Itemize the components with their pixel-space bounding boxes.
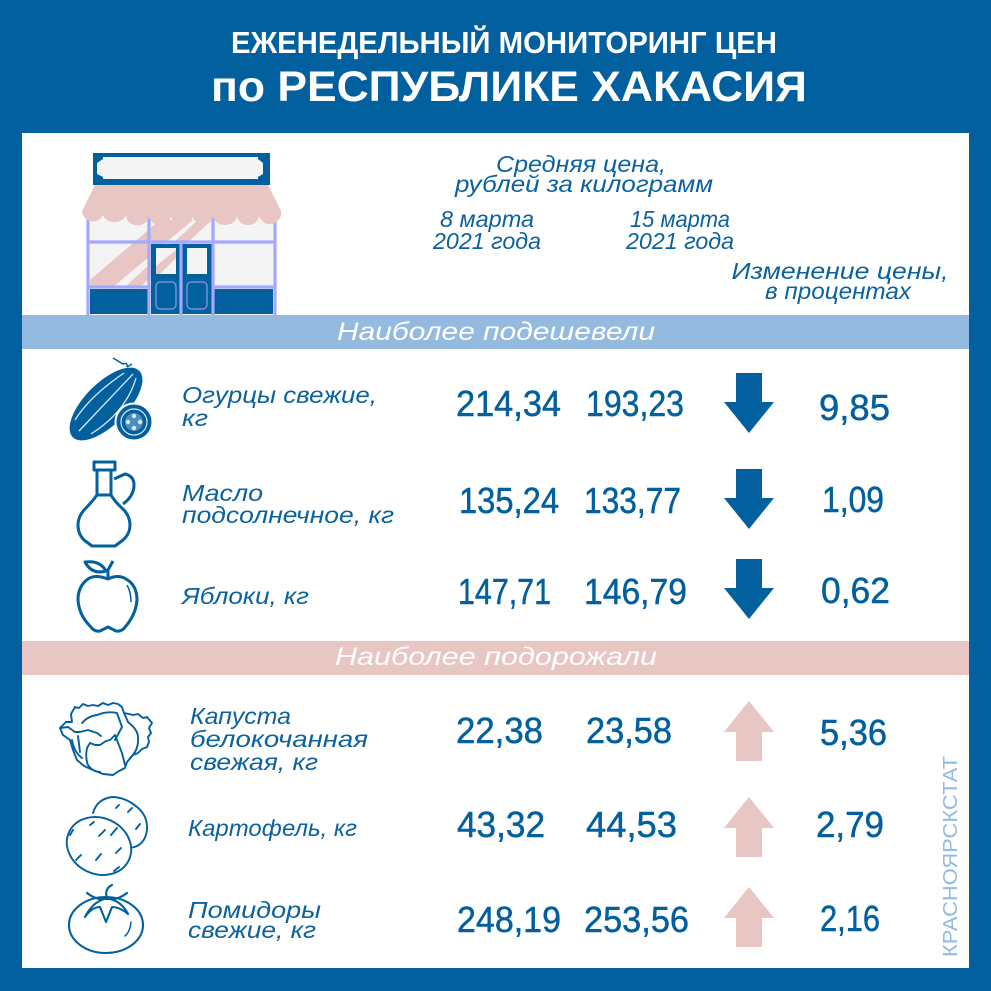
- arrow: up: [724, 701, 774, 761]
- row: cabbage values: 5,36: [820, 712, 887, 753]
- row: cucumbers values: 193,23: [586, 383, 684, 424]
- row: oil label: Масло: [182, 480, 263, 506]
- row: tomatoes label: Помидоры: [188, 897, 321, 923]
- row: apples values: 0,62: [821, 570, 890, 611]
- row: cabbage values: 23,58: [586, 710, 672, 751]
- row: cucumbers label: кг: [182, 405, 208, 431]
- icon: cabbage: [60, 703, 152, 775]
- row: oil values: [459, 479, 884, 521]
- row: cucumbers label: [182, 382, 377, 431]
- row: potatoes values: 44,53: [586, 804, 677, 845]
- row: potatoes values: 2,79: [816, 804, 884, 845]
- row: potatoes values: 43,32: [457, 804, 545, 845]
- row: tomatoes values: 253,56: [584, 899, 689, 940]
- arrow: down: [724, 559, 774, 619]
- title: ЕЖЕНЕДЕЛЬНЫЙ МОНИТОРИНГ ЦЕН: [231, 24, 777, 60]
- column header: average price: Средняя цена,: [496, 151, 666, 177]
- icon: oil bottle: [78, 462, 134, 546]
- row: apples label: Яблоки, кг: [180, 583, 309, 609]
- column header: average price: рублей за килограмм: [454, 171, 713, 197]
- band: cheaper: [22, 315, 969, 349]
- icon: tomato: [69, 885, 143, 953]
- column header: average price: [454, 151, 713, 197]
- icon: cucumber: [58, 356, 154, 452]
- title: [211, 24, 807, 111]
- row: potatoes values: [457, 804, 884, 845]
- row: oil label: [182, 480, 394, 528]
- title: по РЕСПУБЛИКЕ ХАКАСИЯ: [211, 63, 807, 111]
- column header: 15 March: 15 марта: [630, 206, 730, 232]
- row: cabbage values: 22,38: [456, 710, 543, 751]
- watermark: КРАСНОЯРСКСТАТ: [940, 756, 962, 957]
- column header: 8 March: 8 марта: [440, 206, 534, 232]
- row: oil values: 135,24: [459, 480, 559, 521]
- row: potatoes label: Картофель, кг: [188, 815, 357, 841]
- column header: change: Изменение цены,: [732, 258, 948, 284]
- column header: 8 March: 2021 года: [432, 228, 541, 254]
- row: oil values: 1,09: [822, 479, 884, 520]
- row: oil values: 133,77: [584, 480, 681, 521]
- arrow: down: [724, 469, 774, 529]
- row: tomatoes values: 248,19: [457, 899, 561, 940]
- row: cabbage label: белокочанная: [190, 726, 368, 752]
- row: cucumbers values: [456, 383, 890, 428]
- icon: shop: [82, 153, 281, 315]
- row: apples values: 146,79: [584, 571, 687, 612]
- column header: change: [732, 258, 948, 304]
- row: cabbage label: [190, 703, 368, 775]
- column header: 15 March: 2021 года: [625, 228, 734, 254]
- row: oil label: подсолнечное, кг: [182, 502, 394, 528]
- row: apples values: 147,71: [458, 571, 551, 612]
- row: cucumbers label: Огурцы свежие,: [182, 382, 377, 408]
- band: cheaper: Наиболее подешевели: [337, 318, 655, 346]
- icon: apple: [78, 561, 137, 631]
- arrow: down: [724, 373, 774, 433]
- band: more expensive: [22, 641, 969, 675]
- row: tomatoes values: 2,16: [820, 898, 880, 939]
- row: tomatoes values: [457, 898, 880, 940]
- row: cucumbers values: 9,85: [819, 387, 890, 428]
- row: apples values: [458, 570, 890, 612]
- row: tomatoes label: свежие, кг: [188, 917, 316, 943]
- row: cabbage values: [456, 710, 887, 753]
- row: cabbage label: Капуста: [190, 703, 291, 729]
- band: more expensive: Наиболее подорожали: [335, 643, 657, 671]
- row: cucumbers values: 214,34: [456, 383, 561, 424]
- column header: change: в процентах: [765, 278, 913, 304]
- arrow: up: [724, 797, 774, 857]
- column header: 8 March: [432, 206, 541, 254]
- row: cabbage label: свежая, кг: [190, 749, 318, 775]
- column header: 15 March: [625, 206, 734, 254]
- arrow: up: [724, 887, 774, 947]
- icon: potatoes: [57, 797, 147, 885]
- row: tomatoes label: [188, 897, 321, 943]
